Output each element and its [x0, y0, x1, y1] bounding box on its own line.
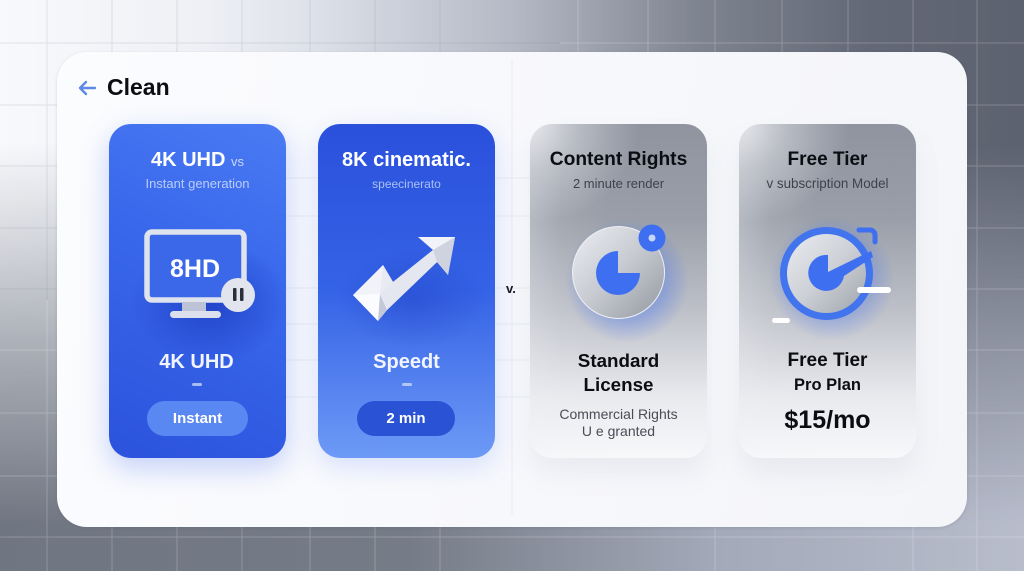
card title: 8K cinematic. — [342, 149, 471, 171]
metric label — [578, 350, 659, 395]
dash — [402, 383, 412, 386]
icon: back arrow — [78, 80, 96, 96]
dash — [192, 383, 202, 386]
metric label: Speedt — [373, 351, 440, 373]
metric label: Standard — [578, 350, 659, 371]
card title: 4K UHD vs — [151, 149, 244, 171]
card subtitle: 2 minute render — [573, 176, 664, 191]
pill: Instant — [147, 401, 248, 436]
rights note — [559, 406, 678, 439]
card subtitle: v subscription Model — [766, 176, 889, 191]
metric label: License — [584, 374, 653, 395]
pill: 2 min: 2 min — [386, 410, 426, 427]
plan label: Free Tier — [788, 350, 867, 371]
panel: 4K UHD card — [109, 124, 286, 458]
separator: vs mark: v. — [506, 281, 516, 296]
metric label: 4K UHD — [159, 351, 234, 373]
icon: disc with pie — [570, 224, 684, 339]
panel: Content Rights card — [530, 124, 707, 458]
plan name: Pro Plan — [794, 376, 861, 394]
icon: monitor — [144, 229, 268, 348]
price: $15/mo — [784, 406, 871, 434]
panel: Free Tier card — [739, 124, 916, 458]
card subtitle: Instant generation — [145, 176, 250, 191]
card title: Content Rights — [550, 149, 687, 170]
panel: main container — [57, 52, 967, 527]
icon: gauge dial — [772, 224, 891, 336]
icon: rising arrow — [353, 237, 455, 328]
card title: Free Tier — [788, 149, 867, 170]
pill: 2 min — [357, 401, 455, 436]
card subtitle: speecinerato — [372, 177, 441, 191]
rights note: U e granted — [582, 423, 655, 439]
rights note: Commercial Rights — [559, 406, 678, 422]
panel: 8K cinematic card — [318, 124, 495, 458]
pill: Instant: Instant — [173, 410, 222, 427]
heading: Clean: Clean — [107, 74, 170, 100]
icon: monitor: 8HD — [170, 255, 220, 283]
